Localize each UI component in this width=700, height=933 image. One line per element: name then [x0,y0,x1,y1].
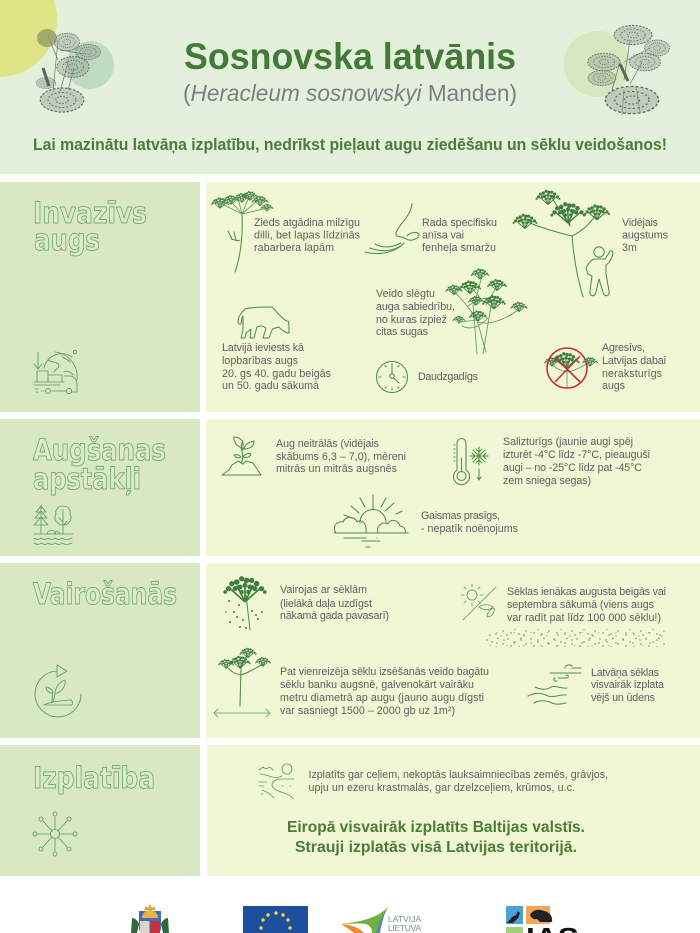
text: seklas: (lielākā daļa uzdīgst [280,598,372,610]
icon: growth cycle [35,665,81,717]
text: agresivs: augs [602,380,625,392]
text: slegta sabiedriba: citas sugas [376,326,428,338]
text: agresivs: Agresīvs, [602,342,645,354]
text: lopbariba: lopbarības augs [222,355,298,367]
text: izplatits: Izplatīts gar ceļiem, nekoptās lauksaimniecības zemēs, grāvjos, [308,769,608,781]
illustration: plant sketch left [36,29,101,112]
logo: IAS [506,906,579,933]
text: seklu banka: var sasniegt 1500 – 2000 gb uz 1m²) [280,705,455,717]
panel: augsanas apstakli label [0,419,200,556]
icon: sun and leaf [461,584,496,620]
decorative circle yellow [0,0,57,77]
decorative circle green right [564,31,630,97]
logo: Latvija Lietuva programme: LATVIJA [388,914,421,924]
icon: wind and water [528,665,581,704]
text: seklas: Vairojas ar sēklām [280,584,367,596]
text: smarza: fenheļa smaržu [422,242,496,254]
icon: globe and truck [34,350,77,394]
icon: sun and clouds [334,495,408,547]
text: seklas ienakas [507,586,666,624]
seed scatter band [483,629,667,647]
text: seklu banka: sēklu banku augsnē, galvenokārt vairāku [280,679,474,691]
text: augsne: skābums 6,3 – 7,0), mēreni [276,451,406,463]
icon: sprout on soil [222,437,261,475]
panel: izplatiba label [0,745,200,876]
text: augsne: mitrās un mitrās augsnēs [276,463,397,475]
text: vejs un udens: vējš un ūdens [591,692,655,704]
panel: augsanas apstakli content [206,419,700,556]
heading: invazivs augs: Invazīvs [33,196,147,230]
panel: invazivs augs label [0,182,200,412]
text: agresivs: neraksturīgs [602,368,662,380]
text: agresivs: Latvijas dabai [602,355,666,367]
icon: plant and spread arrow [214,648,271,717]
icon: tall plant and person [513,190,613,297]
text: seklas: nākamā gada pavasarī) [280,610,389,622]
text: seklas [280,584,389,622]
text: daudzgadigs: Daudzgadīgs [418,371,478,383]
logo: coat of arms of Latvia [131,904,169,933]
text: salizturigs: Salizturīgs (jaunie augi spēj [503,436,633,448]
icon: cow [238,307,289,338]
callout: Europe and Latvia: Strauji izplatās visā Latvijas teritorijā. [295,839,577,856]
text: salizturigs: augi – no -25°C līdz pat -45°C [503,462,642,474]
text: smarza: anīsa vai [422,230,464,242]
illustration: plant sketch right [588,25,670,115]
heading: augsanas apstakli [33,433,166,496]
panel: invazivs augs content [206,182,700,412]
text: agresivs [602,342,666,392]
text: seklas ienakas: septembra sākumā (viens augs [507,599,654,611]
icon: nose and smell [365,204,419,254]
icon: dill flower [211,191,274,272]
text: izplatits [308,769,608,794]
text: augstums: 3m [622,242,637,254]
heading: augsanas apstakli: Augšanas [33,433,166,467]
icon: crossed plant [544,348,598,388]
icon: group of plants [445,268,528,354]
text: salizturigs: izturēt -4°C līdz -7°C, pieauguši [503,449,650,461]
panel: izplatiba content [207,745,700,876]
text: zieds: dilli, bet lapas līdzinās [254,230,360,242]
logo: Latvija Lietuva programme: LIETUVA [388,923,421,933]
text: smarza [422,217,497,254]
heading: invazivs augs: augs [34,223,100,257]
text: augstums [622,217,668,254]
slogan: Lai mazinātu latvāņa izplatību, nedrīkst pieļaut augu ziedēšanu un sēklu veidošanos! [33,136,667,154]
callout: Europe and Latvia: Eiropā visvairāk izplatīts Baltijas valstīs. [287,819,585,836]
panel: vairosanas label [0,563,200,738]
text: lopbariba: un 50. gadu sākumā [222,380,319,392]
text: slegta sabiedriba: auga sabiedrību, [376,301,455,313]
text: zieds [254,217,360,254]
text: gaismas: - nepatīk noēnojums [421,523,518,535]
text: slegta sabiedriba [376,288,455,338]
text: smarza: Rada specifisku [422,217,497,229]
logo: EU flag [243,906,308,933]
text: augsne: Aug neitrālās (vidējais [276,438,379,450]
heading: augsanas apstakli: apstākļi [33,462,141,496]
text: salizturigs [503,436,650,487]
heading: vairosanas: Vairošanās [33,577,177,611]
icon: thermometer and snowflake [454,438,488,485]
text: zieds: Zieds atgādina milzīgu [254,217,360,229]
icon: clock [376,362,408,392]
text: slegta sabiedriba: no kuras izpiež [376,314,447,326]
text: seklu banka: Pat vienreizēja sēklu izsēšanās veido bagātu [280,666,489,678]
heading: izplatiba: Izplatība [33,761,155,795]
text: augsne [276,438,406,475]
text: seklu banka: metru diametrā ap augu (jauno augu dīgsti [280,692,484,704]
subtitle: (Heracleum sosnowskyi Manden) [183,80,517,106]
text: lopbariba: 20. gs 40. gadu beigās [222,368,331,380]
text: zieds: rabarbera lapām [254,242,334,254]
text: lopbariba: Latvijā ieviests kā [222,342,304,354]
decorative circle green left [66,41,114,89]
text: lopbariba [222,342,331,392]
title: Sosnovska latvānis [184,36,516,77]
icon: trees and water [34,505,73,544]
text: seklas ienakas: var radīt pat līdz 100 000 sēklu!) [507,612,661,624]
callout: Europe and Latvia [287,819,585,856]
icon: seed head [223,576,267,630]
text: seklas ienakas: Sēklas ienākas augusta beigās vai [507,586,666,598]
text: salizturigs: zem sniega segas) [503,475,591,487]
text: vejs un udens: visvairāk izplata [591,679,664,691]
text: augstums: Vidējais [622,217,658,229]
text: izplatits: upju un ezeru krastmalās, gar dzelzceļiem, krūmos, u.c. [308,782,575,794]
text: slegta sabiedriba: Veido slēgtu [376,288,435,300]
text: vejs un udens [591,667,664,704]
heading: invazivs augs [33,196,147,257]
text: augstums: augstums [622,230,668,242]
icon: river landscape [259,764,294,799]
text: gaismas [421,510,518,535]
icon: spreading network [33,812,77,856]
text: vejs un udens: Latvāņa sēklas [591,667,659,679]
logo: Latvija Lietuva programme [340,907,421,933]
header band [0,0,700,174]
text: gaismas: Gaismas prasīgs, [421,510,500,522]
panel: vairosanas content [206,563,700,738]
text: seklu banka [280,666,489,717]
